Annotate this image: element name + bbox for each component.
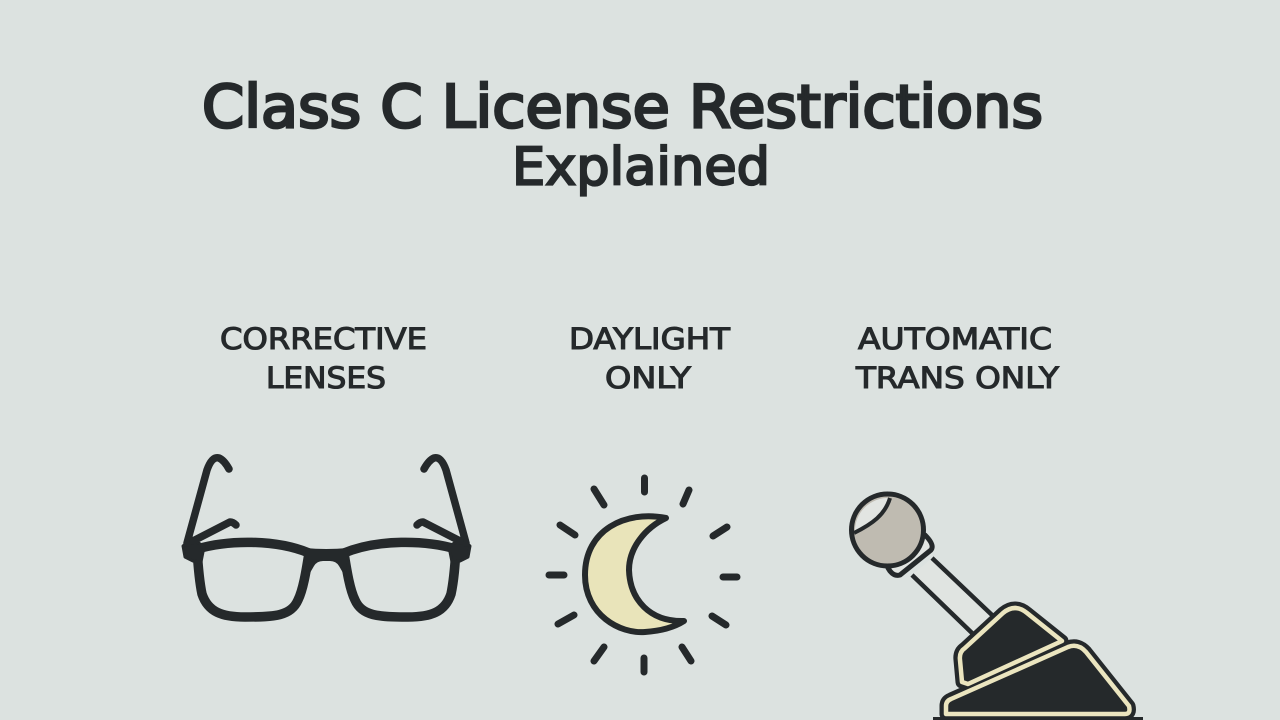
- title: [202, 72, 1043, 198]
- label: daylight only: ONLY: [605, 361, 691, 395]
- label: automatic trans only: TRANS ONLY: [855, 361, 1059, 395]
- icon: gear shifter: [852, 494, 1143, 720]
- label: corrective lenses: LENSES: [266, 361, 386, 395]
- label: corrective lenses: CORRECTIVE: [220, 322, 427, 356]
- label: daylight only: DAYLIGHT: [569, 322, 730, 356]
- icon: moon with sun rays: [549, 478, 737, 672]
- label: automatic trans only: AUTOMATIC: [858, 322, 1052, 356]
- label: daylight only: [569, 322, 730, 395]
- label: automatic trans only: [855, 322, 1059, 395]
- label: corrective lenses: [220, 322, 427, 395]
- icon: glasses: [183, 458, 470, 617]
- title: Explained: [512, 138, 770, 198]
- title: Class C License Restrictions: [202, 72, 1043, 141]
